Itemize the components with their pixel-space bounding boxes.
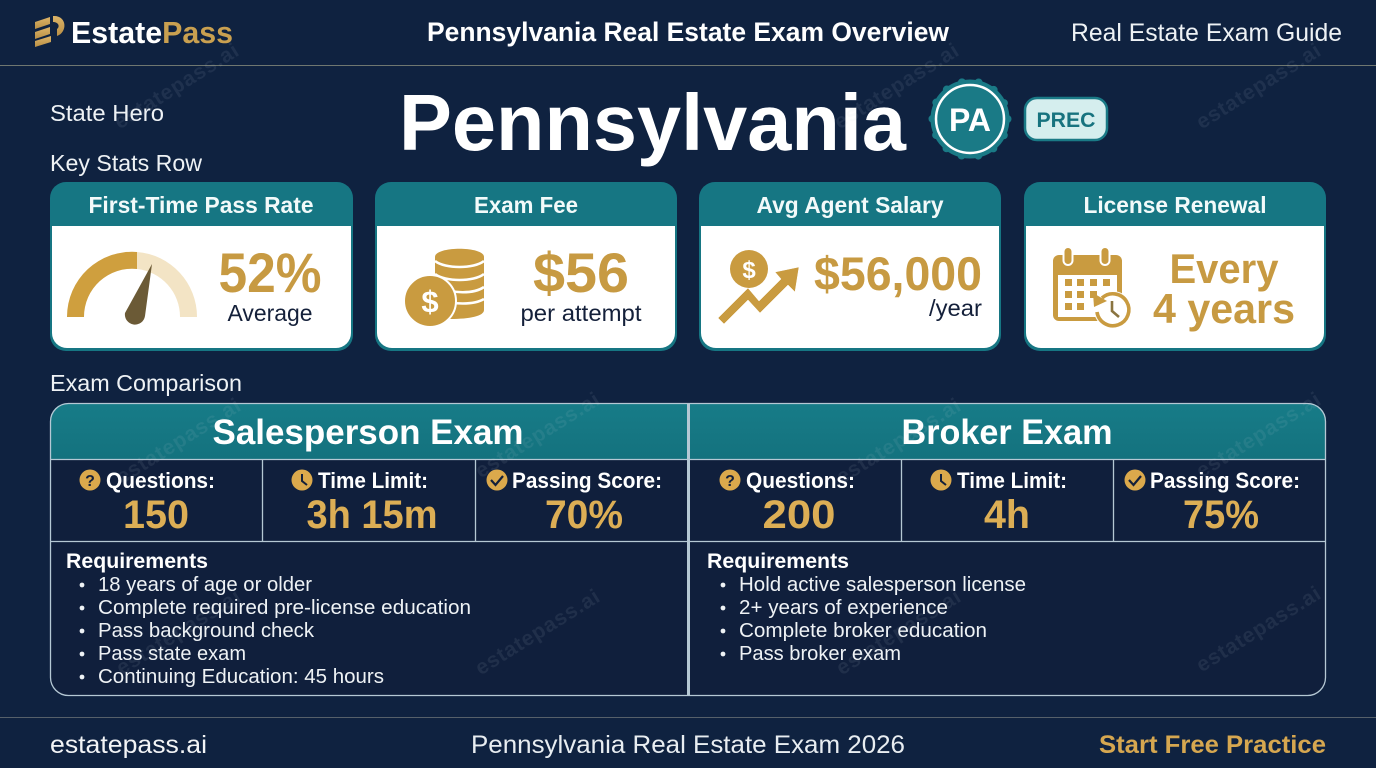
stat: broker time limit [930,468,1067,537]
stat: salesperson passing score [486,468,662,537]
icon: salary growth arrow [718,250,799,324]
watermarks: estatepass.ai [830,39,963,134]
stat: broker passing score: Passing Score: [1150,468,1300,493]
panel: exam fee [375,182,677,351]
stat: salesperson questions: ? [85,473,95,490]
stat value [1153,245,1295,332]
stat: salesperson passing score: Passing Score: [512,468,662,493]
stat: broker passing score: 75% [1183,493,1259,537]
badge: PA seal: PA [949,102,991,138]
stat: broker questions: ? [725,473,735,490]
stat: salesperson time limit: Time Limit: [318,468,428,493]
card heading: First-Time Pass Rate [88,192,314,218]
broker exam heading: Broker Exam [902,413,1112,452]
salesperson requirements [66,549,471,688]
panel: exam comparison table [50,403,1326,696]
stat value: 52% [218,241,322,304]
icon: coin stack: $ [421,284,439,319]
stat: broker passing score [1124,468,1300,537]
watermarks: estatepass.ai [832,394,965,489]
stat value: $56 [533,241,629,304]
state name heading: Pennsylvania [399,78,906,167]
stat caption: per attempt [520,300,642,326]
stat caption: Average [228,300,312,326]
broker requirements: Requirements [707,549,849,573]
stat: salesperson questions: 150 [123,493,189,537]
header title: Pennsylvania Real Estate Exam Overview [427,17,950,47]
stat: salesperson passing score: 70% [545,493,623,537]
salesperson requirements: Continuing Education: 45 hours [98,666,384,688]
watermarks [110,39,1325,680]
header logo [35,15,233,50]
stat: broker questions: 200 [762,493,836,537]
badge: PREC: PREC [1036,109,1096,132]
stat: broker time limit: 4h [984,493,1030,537]
watermarks: estatepass.ai [832,585,965,680]
stat value: $56,000 [814,247,982,300]
broker requirements: Pass broker exam [739,643,901,665]
header guide label: Real Estate Exam Guide [1071,19,1342,47]
broker requirements: 2+ years of experience [739,597,948,619]
stat: salesperson time limit [292,468,438,537]
card heading: Avg Agent Salary [756,192,944,218]
watermarks: estatepass.ai [1192,388,1325,483]
broker requirements: Hold active salesperson license [739,574,1026,596]
footer center caption: Pennsylvania Real Estate Exam 2026 [471,731,905,759]
label: state hero: State Hero [50,100,164,126]
salesperson requirements: Requirements [66,549,208,573]
badge: PA seal [930,80,1010,158]
icon: gauge [67,252,197,325]
watermarks: estatepass.ai [471,388,604,483]
salesperson requirements: 18 years of age or older [98,574,312,596]
stat: salesperson questions: Questions: [106,468,215,493]
stat: salesperson questions [80,468,215,537]
label: key stats row: Key Stats Row [50,150,202,176]
icon: salary growth arrow: $ [742,257,756,284]
watermarks: estatepass.ai [112,585,245,680]
panel: average agent salary [699,182,1001,351]
label: exam comparison: Exam Comparison [50,370,242,396]
salesperson requirements: Complete required pre-license education [98,597,471,619]
badge: PREC [1025,98,1107,140]
watermarks: estatepass.ai [112,394,245,489]
card heading: Exam Fee [474,192,578,218]
logo wordmark: EstatePass [71,15,233,50]
stat: broker questions: Questions: [746,468,855,493]
icon: calendar with clock [1053,247,1132,329]
footer site name: estatepass.ai [50,731,207,759]
card heading: License Renewal [1084,192,1266,218]
salesperson requirements: Pass background check [98,620,315,642]
salesperson exam heading: Salesperson Exam [212,413,524,452]
watermarks: estatepass.ai [110,39,243,134]
stat value: Every [1170,245,1279,292]
panel: first-time pass rate [50,182,353,351]
icon: logo mark [35,16,64,47]
icon: coin stack [404,249,484,327]
salesperson requirements: Pass state exam [98,643,246,665]
stat caption: /year [929,295,982,321]
watermarks: estatepass.ai [1192,582,1325,677]
watermarks: estatepass.ai [1192,39,1325,134]
stat: broker time limit: Time Limit: [957,468,1067,493]
watermarks: estatepass.ai [471,585,604,680]
broker requirements [707,549,1026,665]
footer call to action: Start Free Practice [1099,731,1326,759]
stat: broker questions [720,468,855,537]
panel: license renewal [1024,182,1326,351]
stat value: 4 years [1153,285,1295,332]
stat: salesperson time limit: 3h 15m [306,493,438,537]
broker requirements: Complete broker education [739,620,987,642]
